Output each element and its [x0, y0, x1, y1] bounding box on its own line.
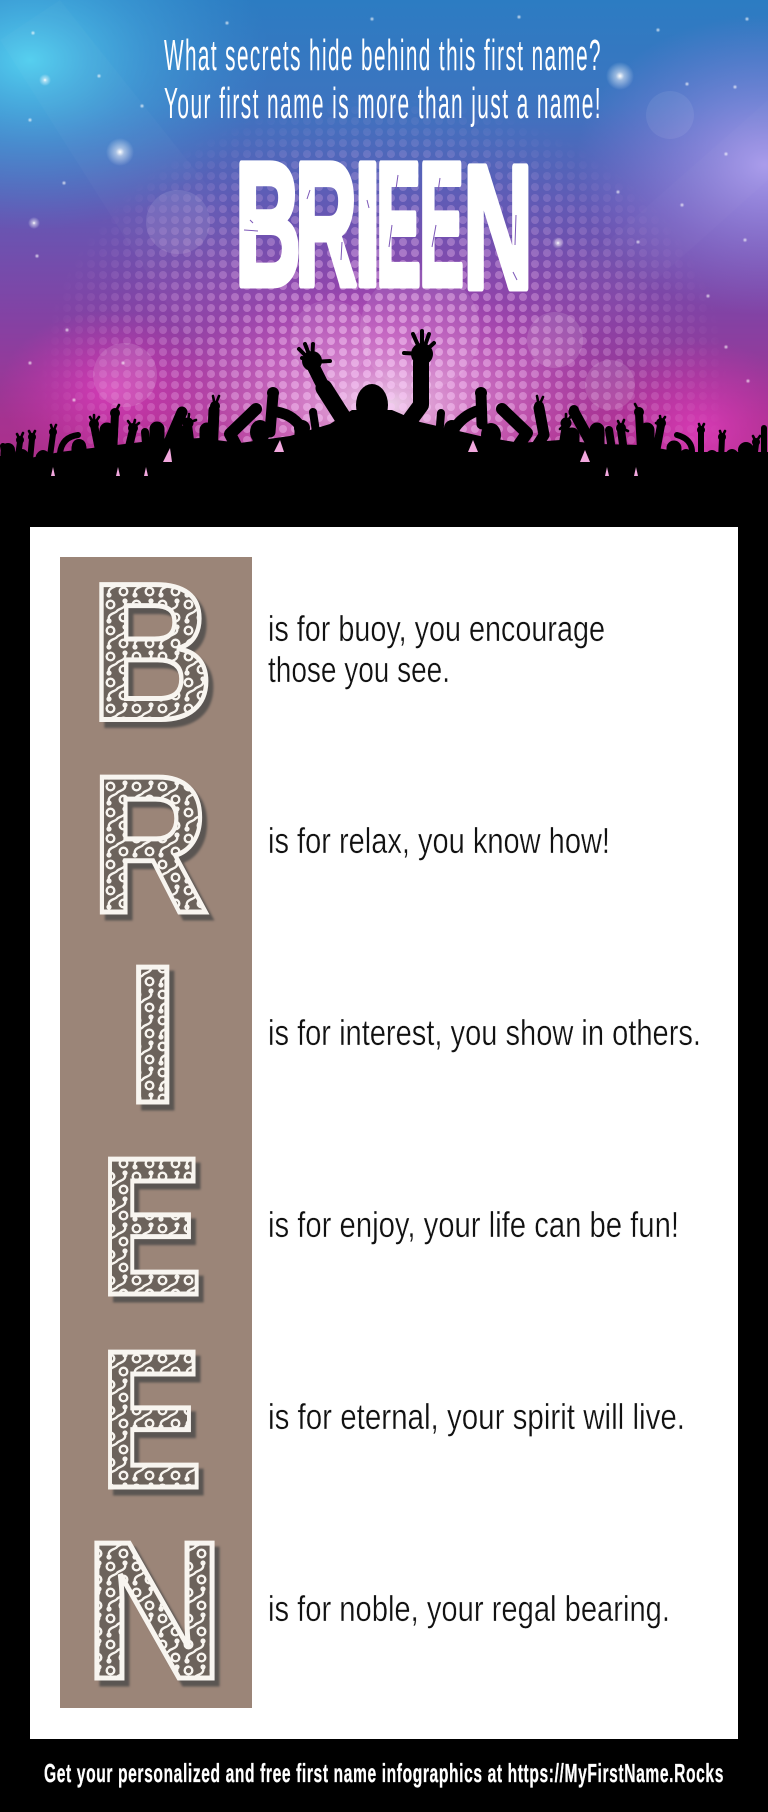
sparkling stars — [28, 14, 750, 402]
text: B meaning: is for buoy, you encourage — [268, 608, 605, 649]
text: B meaning — [268, 608, 605, 690]
header concert background — [0, 0, 768, 458]
ornamental letter E (second): E — [100, 1310, 203, 1529]
name title: BRIEEN: E — [419, 127, 464, 323]
name title: BRIEEN: E — [376, 127, 421, 323]
name title: BRIEEN: B — [235, 127, 301, 323]
ornamental letter R: R — [91, 735, 209, 954]
ornamental letter B: B — [90, 542, 214, 762]
ornamental letter N: N — [84, 1501, 225, 1720]
ornamental letter I: I — [126, 925, 180, 1144]
text: E meaning: is for enjoy, your life can be fun! — [268, 1204, 679, 1245]
name title: BRIEEN: N — [463, 130, 533, 326]
name title: BRIEEN: I — [354, 127, 381, 323]
crowd silhouette — [0, 331, 768, 527]
ornamental letter E: E — [100, 1117, 203, 1336]
text: B meaning: those you see. — [268, 649, 450, 690]
header question text — [164, 31, 602, 128]
text: N meaning: is for noble, your regal bearing. — [268, 1588, 670, 1629]
text: second E meaning: is for eternal, your spirit will live. — [268, 1396, 685, 1437]
white content panel — [30, 527, 738, 1739]
name title: BRIEEN — [235, 127, 533, 326]
brown letter column — [60, 557, 252, 1708]
text: R meaning: is for relax, you know how! — [268, 820, 610, 861]
name title: BRIEEN: R — [295, 127, 357, 323]
